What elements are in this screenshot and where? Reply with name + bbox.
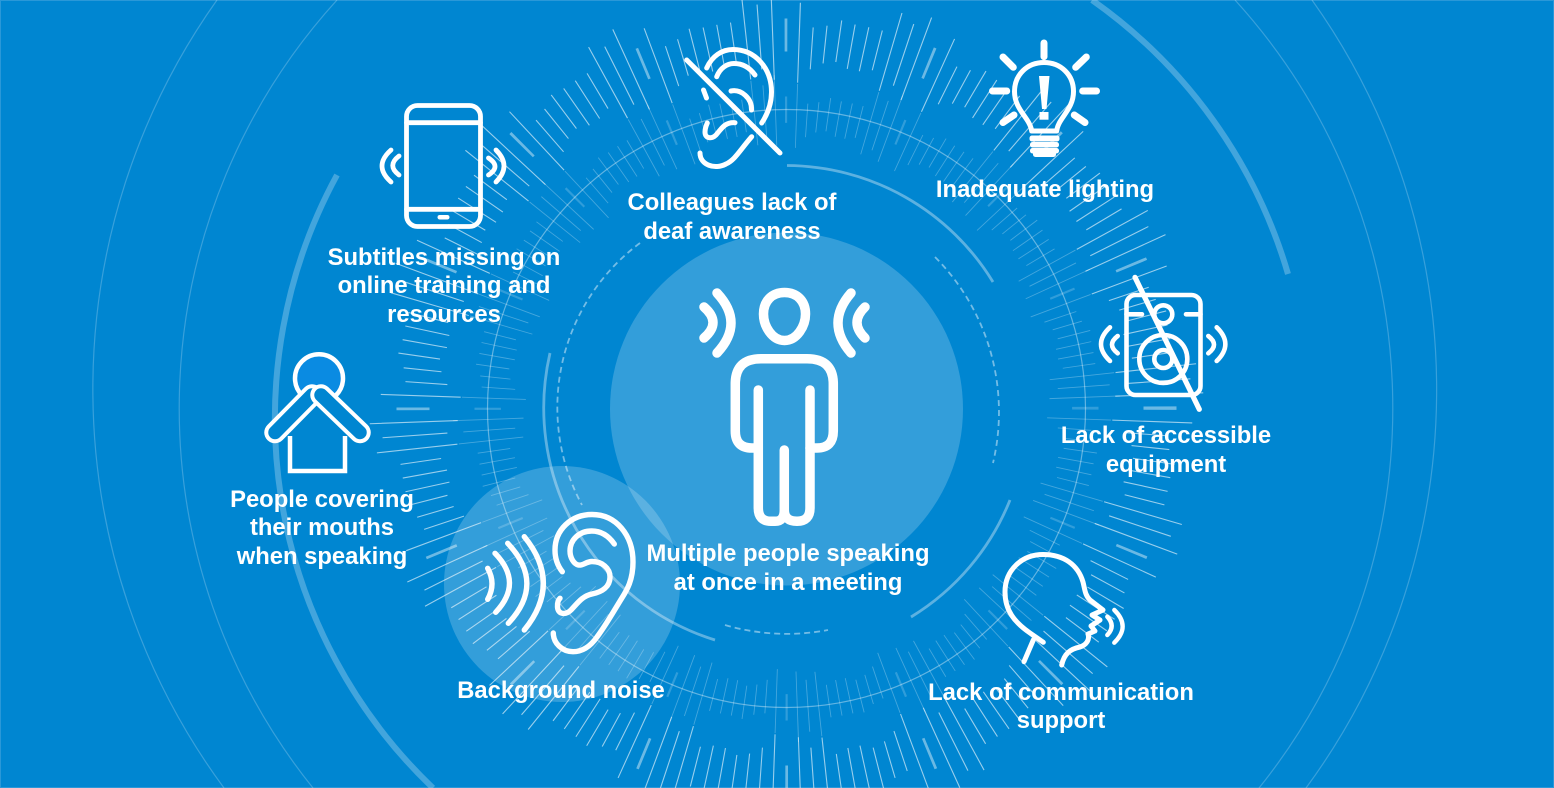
label: subtitles: resources	[387, 301, 501, 328]
central circle	[610, 232, 963, 586]
label: lighting: Inadequate lighting	[936, 176, 1154, 203]
icon: phone with vibration	[382, 106, 504, 226]
thick arc upper right	[1092, 0, 1288, 274]
icon: ear with sound waves	[488, 514, 633, 652]
inner radial ticks	[488, 110, 1085, 707]
icon: speaking head	[1005, 554, 1123, 665]
background noise circle	[444, 466, 680, 702]
label: background noise: Background noise	[457, 677, 665, 704]
label: covering mouths: People covering	[230, 486, 414, 513]
label: multiple people: at once in a meeting	[674, 569, 902, 596]
outer radial ticks	[413, 35, 1160, 782]
label: accessible equipment: equipment	[1106, 451, 1226, 478]
icon: light bulb	[992, 43, 1096, 157]
icon: person with sound waves	[704, 292, 865, 521]
label: subtitles: Subtitles missing on	[328, 244, 560, 271]
label: subtitles: online training and	[338, 272, 550, 299]
label: deaf awareness: Colleagues lack of	[628, 189, 837, 216]
icon: person covering mouth	[275, 354, 360, 471]
label: covering mouths: their mouths	[250, 514, 394, 541]
label: multiple people: Multiple people speaking	[647, 540, 929, 567]
label: communication support: Lack of communication	[928, 679, 1194, 706]
icon: crossed-out speaker	[1101, 277, 1225, 409]
label: communication support: support	[1017, 707, 1105, 734]
icon: crossed-out ear	[687, 50, 780, 167]
thick arc left	[275, 175, 433, 788]
inner arcs	[544, 166, 1010, 640]
dashed inner arcs	[557, 243, 999, 634]
label: accessible equipment: Lack of accessible	[1061, 422, 1271, 449]
label: deaf awareness: deaf awareness	[643, 218, 821, 245]
label: covering mouths: when speaking	[236, 543, 407, 570]
thin ring	[488, 110, 1086, 708]
second outer thin ring arcs	[179, 0, 1393, 788]
